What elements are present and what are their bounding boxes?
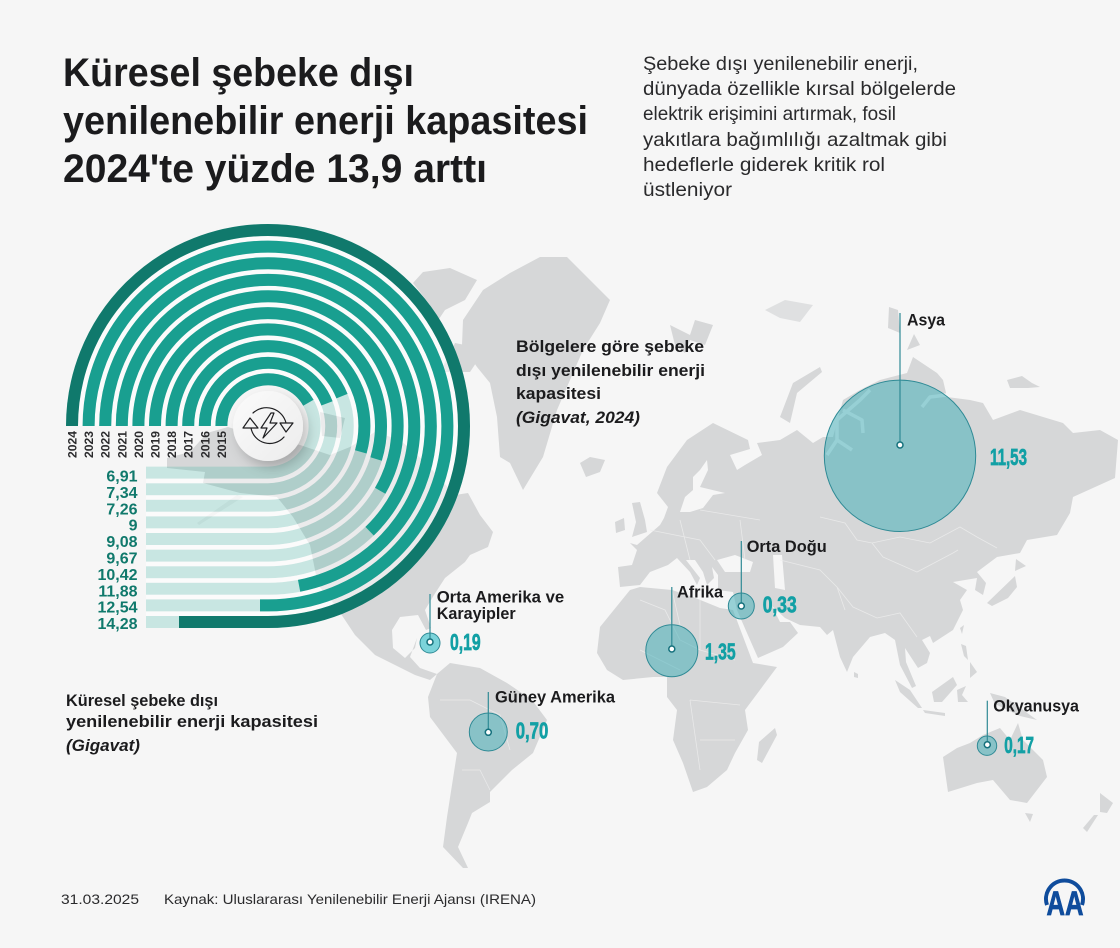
value labels: 10,42 [97,567,138,584]
value labels: 9,08 [106,534,138,551]
marker: Orta Doğu: Orta Doğu [747,537,827,556]
intro text: yakıtlara bağımlılığı azaltmak gibi [643,129,947,151]
title: Küresel şebeke dışı [63,51,414,95]
marker: Asya: 11,53 [990,444,1027,470]
intro text [643,53,956,201]
heading: global chart: (Gigavat) [66,736,140,755]
marker: Güney Amerika: 0,70 [516,717,548,743]
heading: regional map: (Gigavat, 2024) [516,408,640,427]
year labels [66,431,229,458]
marker: Afrika: Afrika [677,583,724,602]
ring values filled [72,230,464,622]
world map [167,257,1118,868]
title: yenilenebilir enerji kapasitesi [63,99,588,143]
value labels: 7,34 [106,485,138,502]
heading: global chart [66,691,318,755]
marker: Orta Doğu [728,537,827,619]
value labels: 12,54 [97,600,138,617]
marker: Orta Doğu: 0,33 [763,592,797,618]
value labels: 9,67 [106,550,138,568]
year labels: 2019 [148,431,162,458]
year labels: 2016 [198,431,212,458]
ring gaps [80,238,456,614]
heading: regional map: kapasitesi [516,384,601,403]
year labels: 2017 [182,431,196,458]
heading: regional map [516,337,705,427]
marker: Güney Amerika: Güney Amerika [495,687,616,706]
value labels: 6,91 [106,468,138,486]
marker: Orta Amerika ve Karayipler [420,588,564,655]
year labels: 2023 [82,431,96,458]
marker: Okyanusya [977,697,1080,758]
year labels: 2022 [99,431,113,458]
chart: capacity rings by year [66,230,464,633]
year labels: 2018 [165,431,179,458]
value labels: 14,28 [97,616,138,633]
icon: AA logo [1046,880,1084,923]
title [63,51,588,191]
heading: regional map: dışı yenilenebilir enerji [516,361,705,380]
marker: Okyanusya: 0,17 [1004,732,1034,758]
year labels: 2015 [215,431,229,458]
icon: AA logo: AA [1046,885,1084,923]
intro text: dünyada özellikle kırsal bölgelerde [643,78,956,100]
marker: Güney Amerika [469,687,616,751]
marker: Orta Amerika ve Karayipler: Karayipler [437,604,516,623]
year labels: 2021 [115,431,129,458]
marker: Orta Amerika ve Karayipler: Orta Amerika ve [437,588,564,607]
intro text: Şebeke dışı yenilenebilir enerji, [643,53,918,75]
marker: Okyanusya: Okyanusya [993,697,1080,716]
value labels [97,468,138,633]
value labels: 11,88 [98,583,138,600]
footer date: 31.03.2025 [61,891,139,907]
intro text: elektrik erişimini artırmak, fosil [643,103,896,125]
marker: Orta Amerika ve Karayipler: 0,19 [450,629,481,655]
heading: global chart: Küresel şebeke dışı [66,691,218,710]
intro text: hedeflerle giderek kritik rol [643,154,885,176]
year labels: 2020 [132,431,146,458]
marker: Asya: Asya [907,310,946,330]
year labels: 2024 [66,431,80,458]
marker: Asya [824,310,1027,532]
value labels: 7,26 [106,501,138,518]
title: 2024'te yüzde 13,9 arttı [63,147,487,191]
intro text: üstleniyor [643,179,732,201]
icon: renewable energy badge [233,391,303,461]
value labels: 9 [129,518,138,535]
footer source: Kaynak: Uluslararası Yenilenebilir Enerji Ajansı (IRENA) [164,891,536,907]
heading: regional map: Bölgelere göre şebeke [516,337,704,356]
heading: global chart: yenilenebilir enerji kapasitesi [66,712,318,731]
marker: Afrika [646,583,736,677]
marker: Afrika: 1,35 [705,638,736,664]
ring tracks [72,230,464,622]
